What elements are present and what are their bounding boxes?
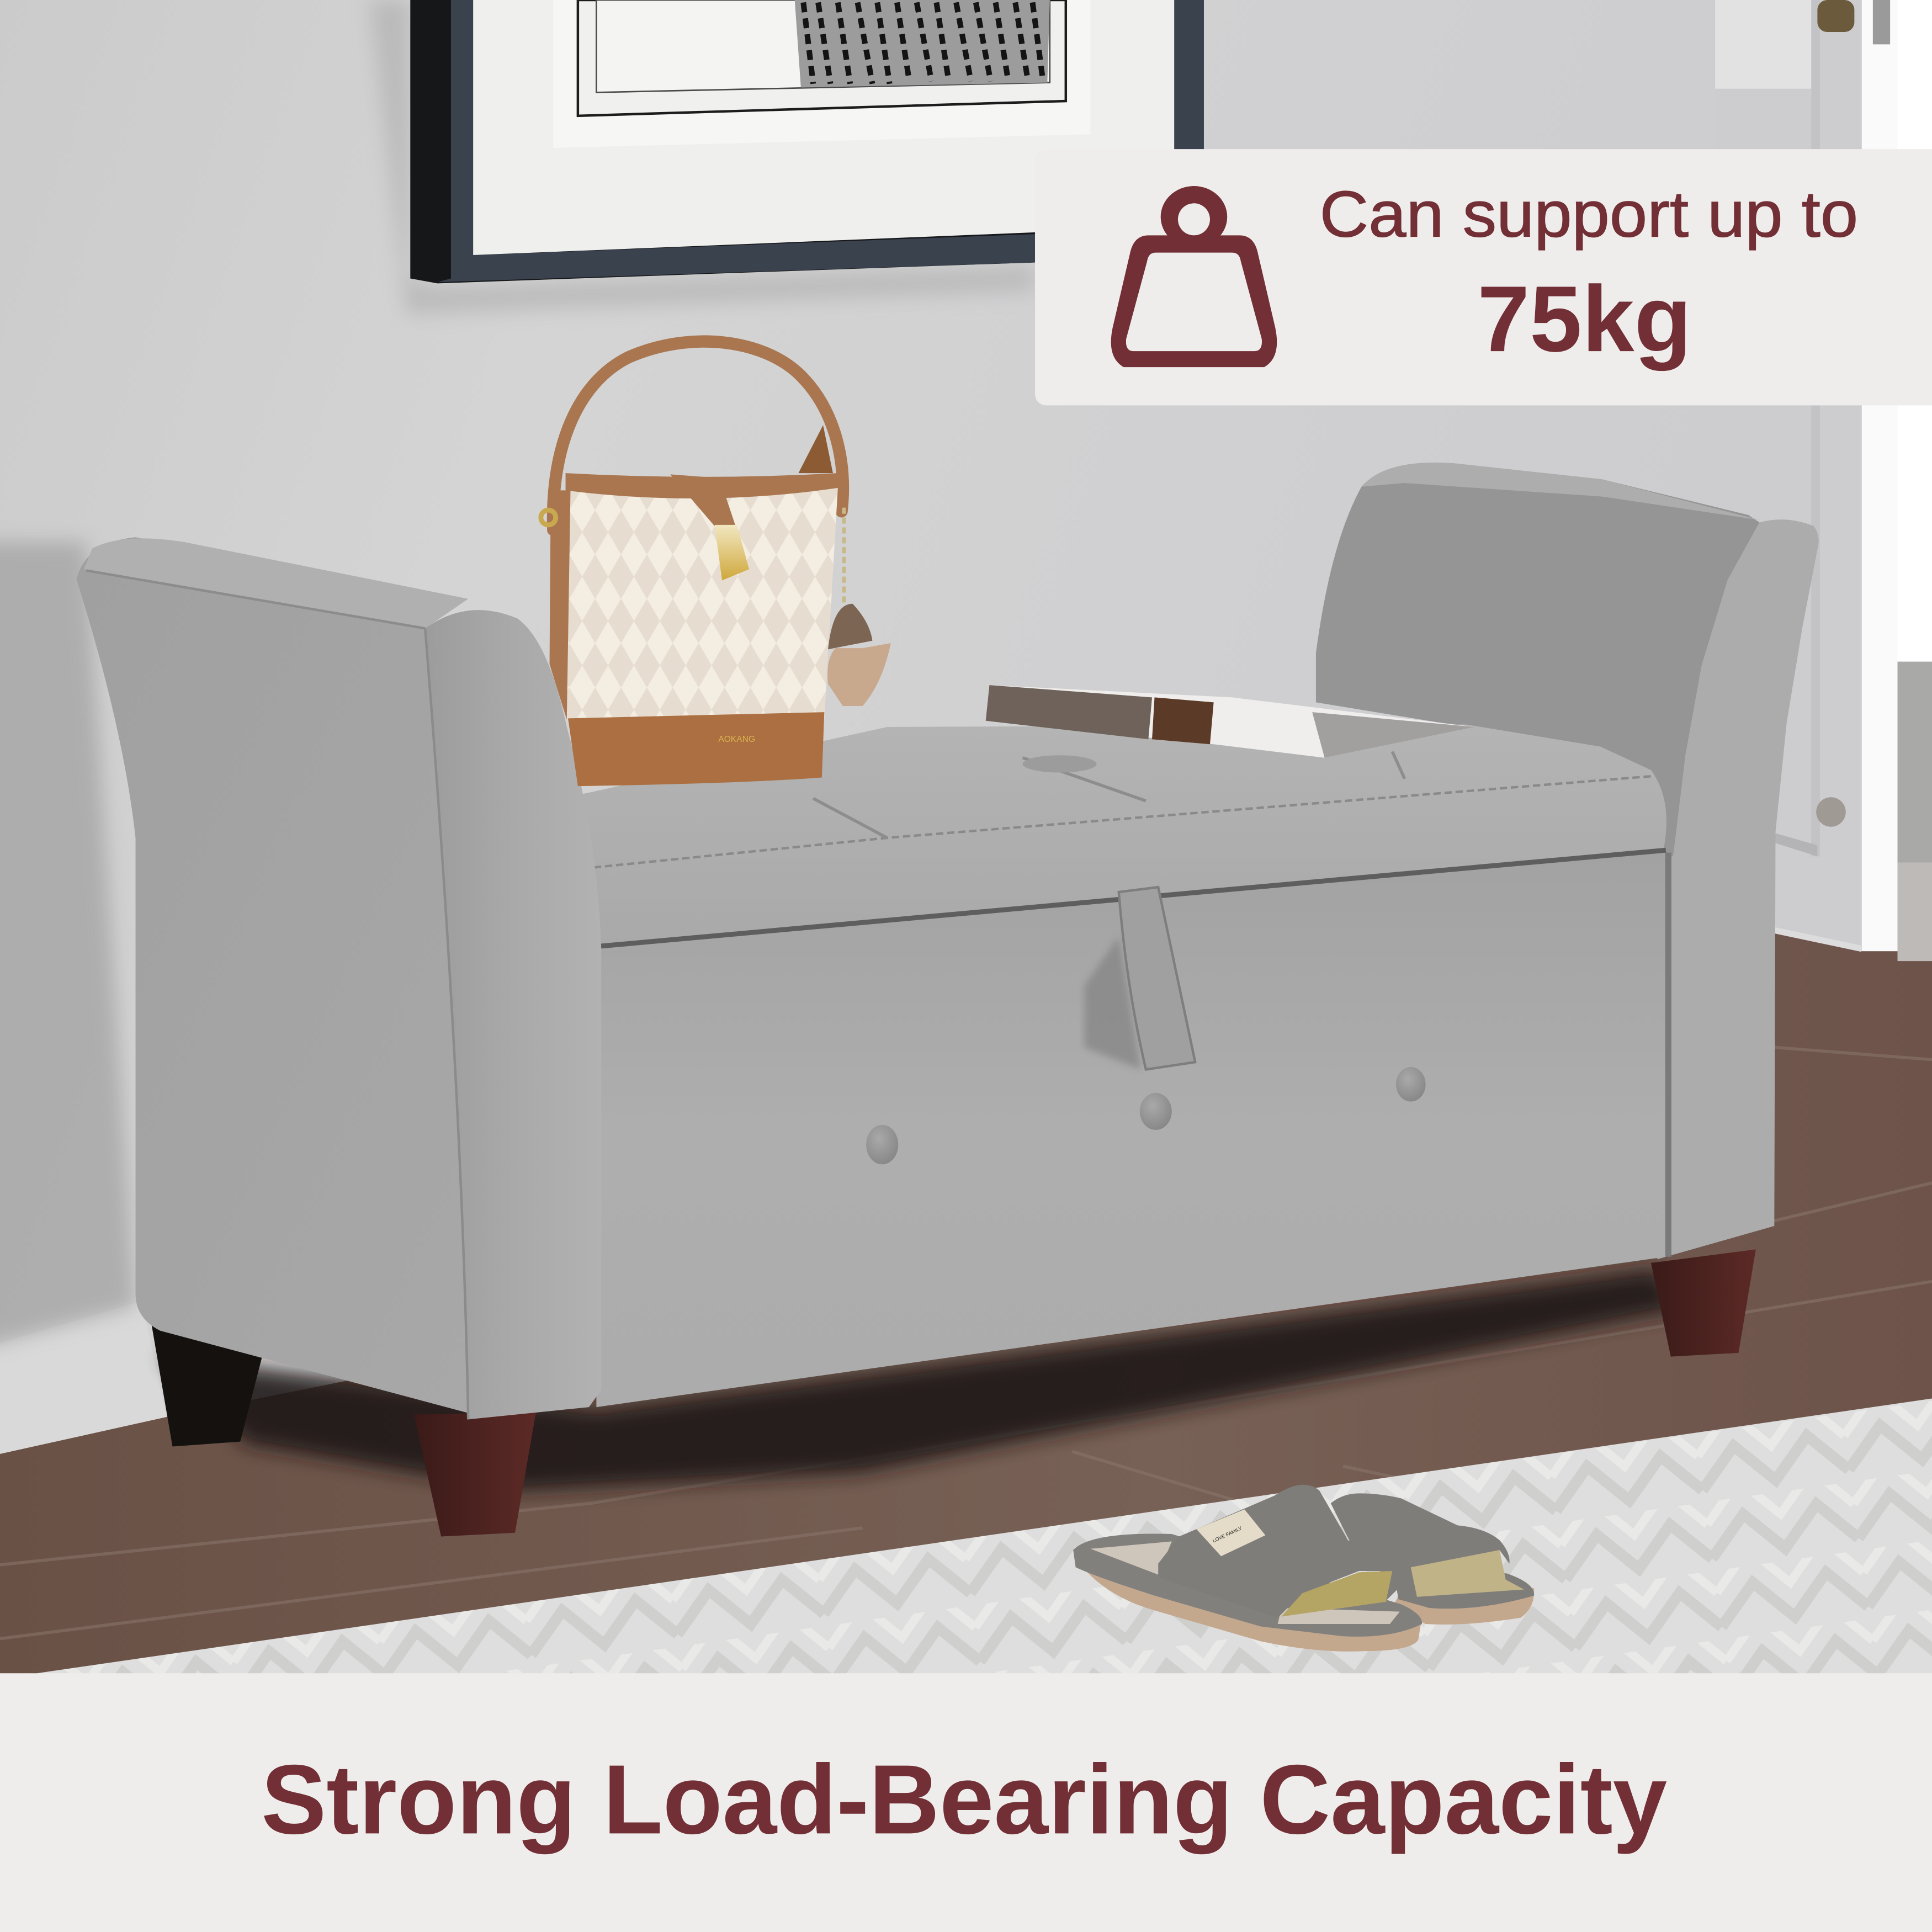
door knob xyxy=(1816,797,1846,827)
front panel xyxy=(596,850,1666,1407)
right arm front xyxy=(1657,519,1819,1259)
handbag xyxy=(541,342,891,786)
gold ring xyxy=(541,510,556,525)
bag strap xyxy=(670,474,736,526)
slippers xyxy=(1073,1485,1534,1652)
right arm top band xyxy=(1362,463,1760,520)
bench xyxy=(76,463,1819,1536)
right arm inner face xyxy=(1316,463,1760,862)
bag handle xyxy=(553,342,843,530)
bag left panel xyxy=(550,490,570,720)
tufted buttons xyxy=(866,1067,1426,1164)
wall xyxy=(0,0,1725,1479)
seat cushion xyxy=(579,724,1666,946)
keychain charm xyxy=(827,508,891,706)
floor xyxy=(0,862,1932,1725)
right arm seam xyxy=(1667,853,1670,1257)
magazine xyxy=(986,685,1475,758)
right slipper upper xyxy=(1331,1493,1510,1589)
right slipper insole xyxy=(1411,1550,1524,1597)
left slipper insole front xyxy=(1278,1608,1400,1624)
left arm side face xyxy=(76,537,483,1417)
heading: Strong Load-Bearing Capacity xyxy=(261,1744,1667,1854)
leg: back left xyxy=(152,1325,262,1447)
floor shadow under bench xyxy=(160,1269,1682,1491)
left arm top band xyxy=(84,538,468,628)
wall shadow behind bench xyxy=(0,542,136,1355)
artwork: leopard fur xyxy=(795,0,1050,87)
callout text: can support up to: Can support up to xyxy=(1320,178,1858,251)
left arm seam xyxy=(425,628,468,1419)
left slipper upper xyxy=(1158,1485,1405,1618)
left slipper opening xyxy=(1281,1571,1392,1617)
brand label: AOKANG xyxy=(718,735,755,744)
panel: capacity callout xyxy=(1035,149,1932,405)
strap handle xyxy=(1119,887,1195,1070)
left slipper insole xyxy=(1090,1541,1172,1575)
slipper label xyxy=(1196,1509,1265,1556)
leg: front left xyxy=(414,1412,536,1536)
panel: bottom banner xyxy=(0,1673,1932,1932)
left slipper sole xyxy=(1076,1559,1422,1652)
right slipper sole xyxy=(1392,1583,1534,1625)
strap shadow xyxy=(1084,936,1141,1070)
slipper label: LOVE FAMILY xyxy=(1212,1525,1243,1543)
left slipper rim xyxy=(1073,1533,1422,1637)
left arm top seam xyxy=(86,570,425,628)
bag body xyxy=(567,488,838,720)
bag base xyxy=(568,712,824,786)
leg: right xyxy=(1651,1249,1756,1357)
gold clasp xyxy=(715,525,749,580)
callout value: 75kg: 75kg xyxy=(1477,266,1692,371)
rug xyxy=(37,1398,1932,1688)
icon: weight xyxy=(1111,186,1277,367)
picture frame xyxy=(370,0,1204,314)
baseboard xyxy=(0,1301,166,1454)
right slipper rim xyxy=(1392,1565,1534,1609)
frame shadow xyxy=(370,0,1035,314)
bag rim xyxy=(566,473,838,498)
left arm front xyxy=(425,610,601,1419)
zipper opening xyxy=(798,425,833,473)
door and right background xyxy=(1715,0,1932,986)
